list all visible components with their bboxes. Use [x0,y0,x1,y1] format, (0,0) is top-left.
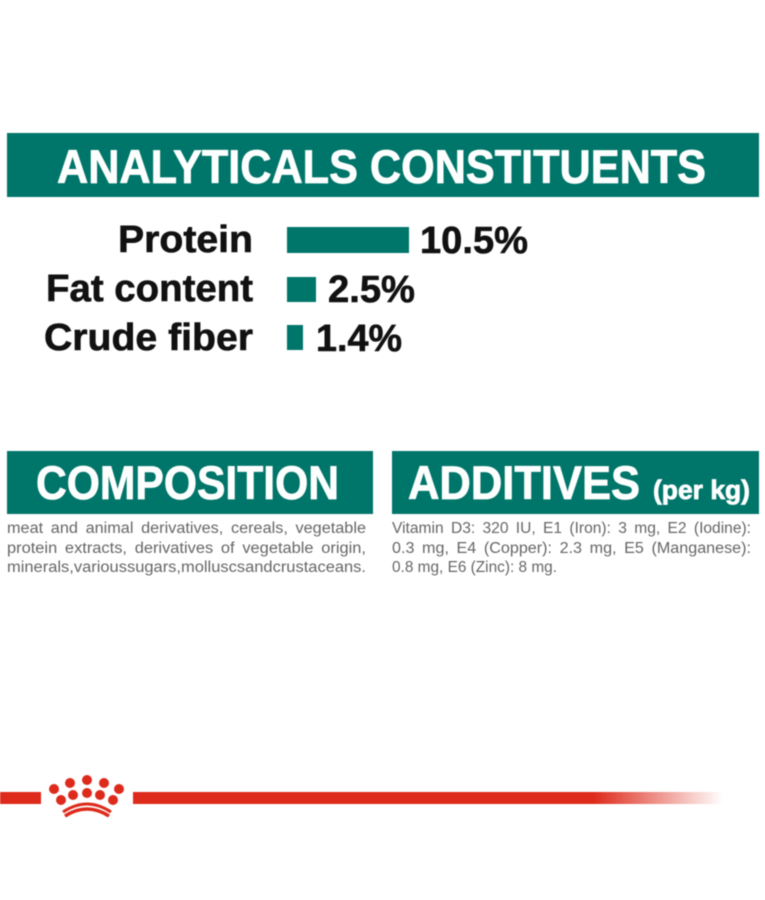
icon: royal crown logo [49,775,124,816]
bar chart: analytical constituents [44,219,528,360]
row: fat content: Fat content [46,268,253,310]
heading: per kg: (per kg) [653,475,750,505]
text: additives body: Vitamin D3: 320 IU, E1 (Iron): 3 mg, E2 (Iodine): [392,520,751,537]
text: composition body: meat and animal derivatives, cereals, vegetable [7,520,366,537]
text: composition body [7,520,366,576]
row: crude fiber: 1.4% [316,318,402,360]
row: protein [118,219,528,262]
row: fat content [46,268,415,311]
heading: analyticals constituents: ANALYTICALS CONSTITUENTS [57,140,706,193]
text: additives body [392,520,751,576]
panel: analyticals constituents header [7,133,759,197]
text: additives body: 0.8 mg, E6 (Zinc): 8 mg. [392,559,557,576]
heading: composition: COMPOSITION [36,456,339,509]
row: protein: Protein [118,219,253,261]
row: fat content: 2.5% [328,269,415,311]
red line left [0,792,41,804]
red line right with fade [133,792,723,804]
row: crude fiber: Crude fiber [44,317,253,359]
row: crude fiber [44,317,402,360]
text: composition body: protein extracts, derivatives of vegetable origin, [7,540,366,557]
panel: composition [7,451,373,514]
heading: additives: ADDITIVES [408,456,640,509]
row: protein: 10.5% [420,220,528,262]
text: composition body: minerals,varioussugars,molluscsandcrustaceans. [7,559,366,576]
panel: additives [392,451,759,514]
text: additives body: 0.3 mg, E4 (Copper): 2.3 mg, E5 (Manganese): [392,540,751,557]
